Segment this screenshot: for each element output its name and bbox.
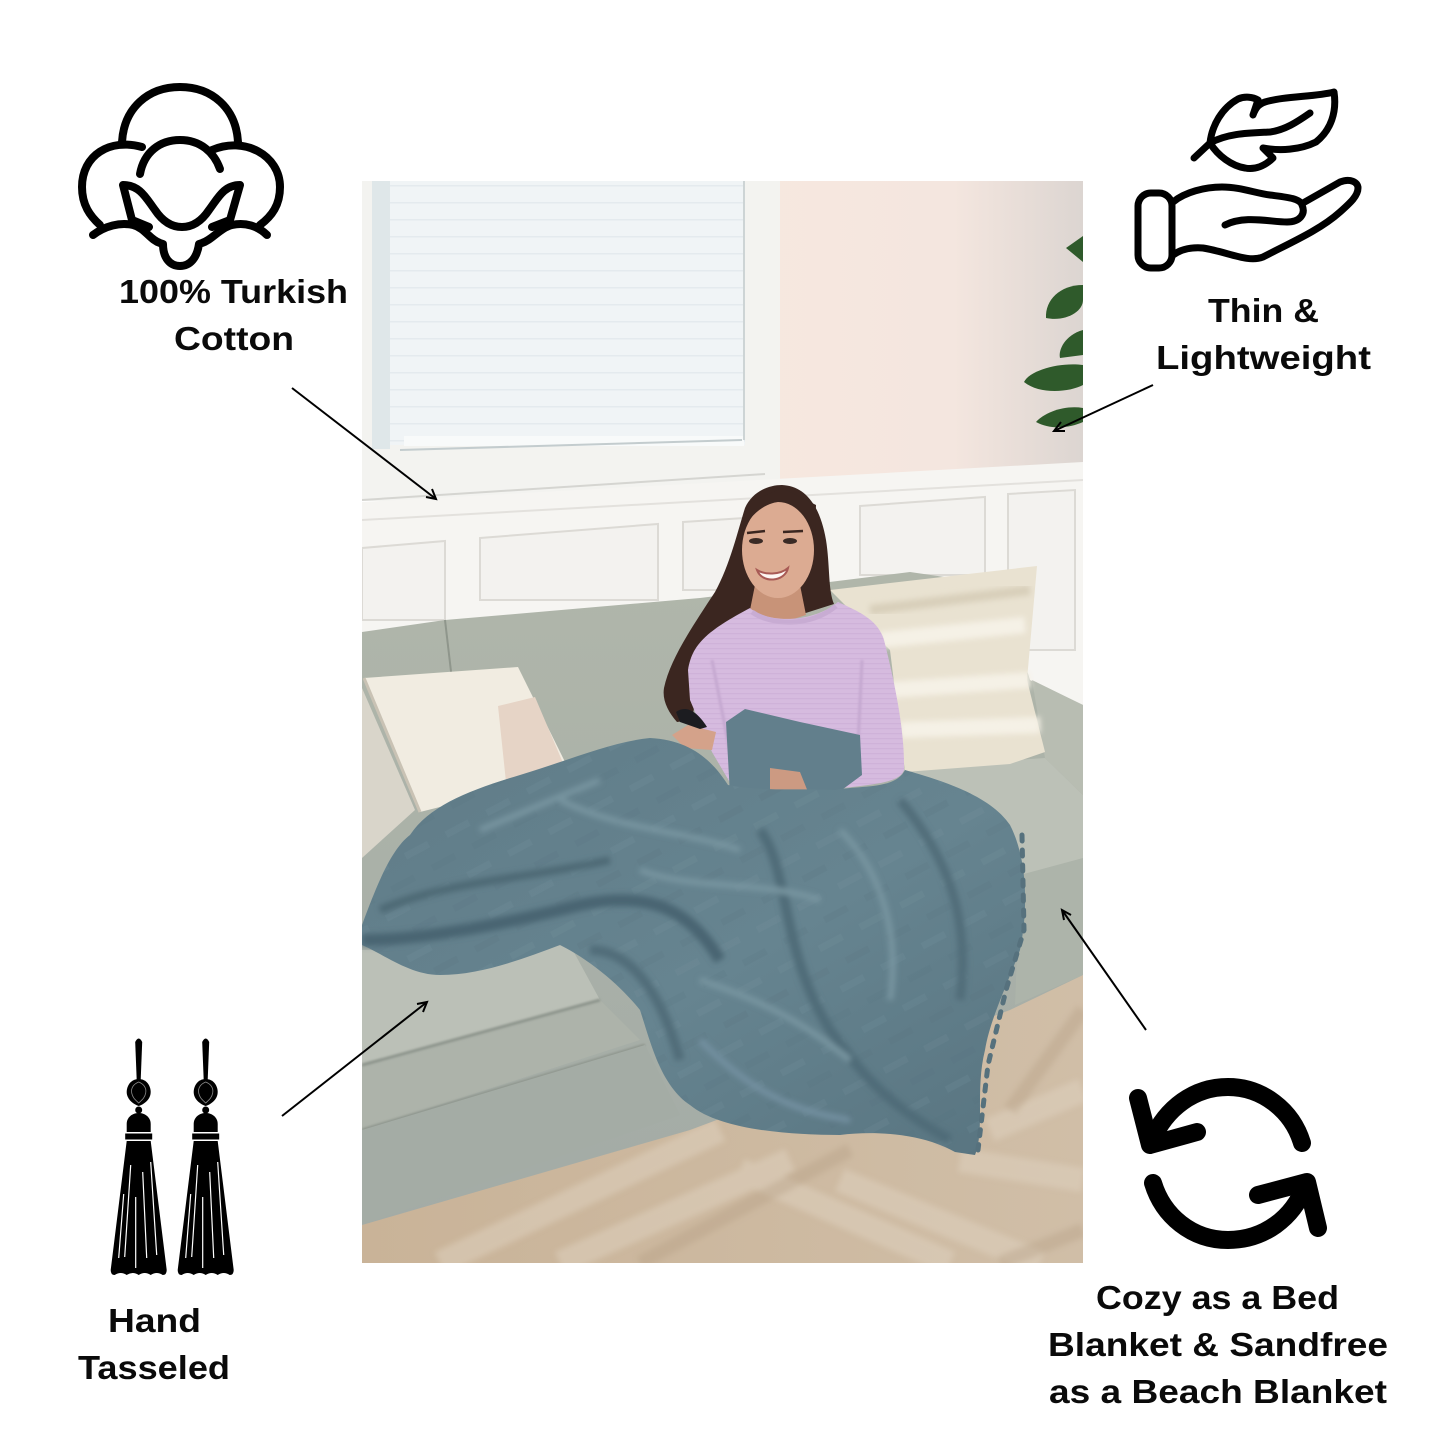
woman: neck and face: [742, 502, 816, 619]
wainscot panels: [362, 462, 1083, 720]
tassel right: [178, 1038, 234, 1275]
icon: circular arrows: [1138, 1087, 1318, 1240]
heading: Cozy as a Bed Blanket & Sandfree as a Beach Blanket: as a Beach Blanket: [1049, 1373, 1387, 1410]
heading: Hand Tasseled: [78, 1302, 230, 1386]
cream pillow: [364, 667, 571, 812]
plant: [1024, 236, 1083, 427]
heading: Cozy as a Bed Blanket & Sandfree as a Beach Blanket: [1048, 1279, 1388, 1410]
forearm and hand with remote: [672, 709, 716, 750]
arrow: cotton label to photo: [292, 388, 436, 499]
patterned pillow right: [830, 566, 1045, 772]
heading: Cozy as a Bed Blanket & Sandfree as a Beach Blanket: Cozy as a Bed: [1096, 1279, 1339, 1316]
icon: cotton boll: [82, 87, 280, 266]
heading: 100% Turkish Cotton: 100% Turkish: [119, 273, 348, 310]
rug: [362, 975, 1083, 1263]
hair: [664, 485, 834, 722]
striped pillow left: [362, 688, 415, 858]
heading: Hand Tasseled: Tasseled: [78, 1349, 230, 1386]
heading: Thin & Lightweight: [1156, 292, 1371, 376]
icon: tassels: [111, 1038, 234, 1275]
heading: Thin & Lightweight: Thin &: [1208, 292, 1319, 329]
arrow: lightweight label to photo: [1054, 385, 1153, 431]
tassel left: [111, 1038, 167, 1275]
photo: woman on sofa under blanket: [362, 181, 1083, 1263]
wall: [780, 181, 1083, 479]
heading: Cozy as a Bed Blanket & Sandfree as a Beach Blanket: Blanket & Sandfree: [1048, 1326, 1388, 1363]
fringe tassels: [978, 835, 1024, 1150]
blanket folds: [362, 780, 962, 1140]
heading: 100% Turkish Cotton: Cotton: [174, 320, 294, 357]
blanket: [362, 709, 1025, 1155]
arrow: tassel label to photo: [282, 1002, 427, 1116]
heading: Thin & Lightweight: Lightweight: [1156, 339, 1371, 376]
heading: 100% Turkish Cotton: [119, 273, 348, 357]
sweater: [688, 602, 904, 791]
window: [362, 181, 780, 501]
heading: Hand Tasseled: Hand: [108, 1302, 201, 1339]
icon: feather over hand: [1138, 92, 1358, 268]
arrow: cozy label to photo: [1062, 910, 1146, 1030]
sofa: [362, 572, 1083, 1225]
